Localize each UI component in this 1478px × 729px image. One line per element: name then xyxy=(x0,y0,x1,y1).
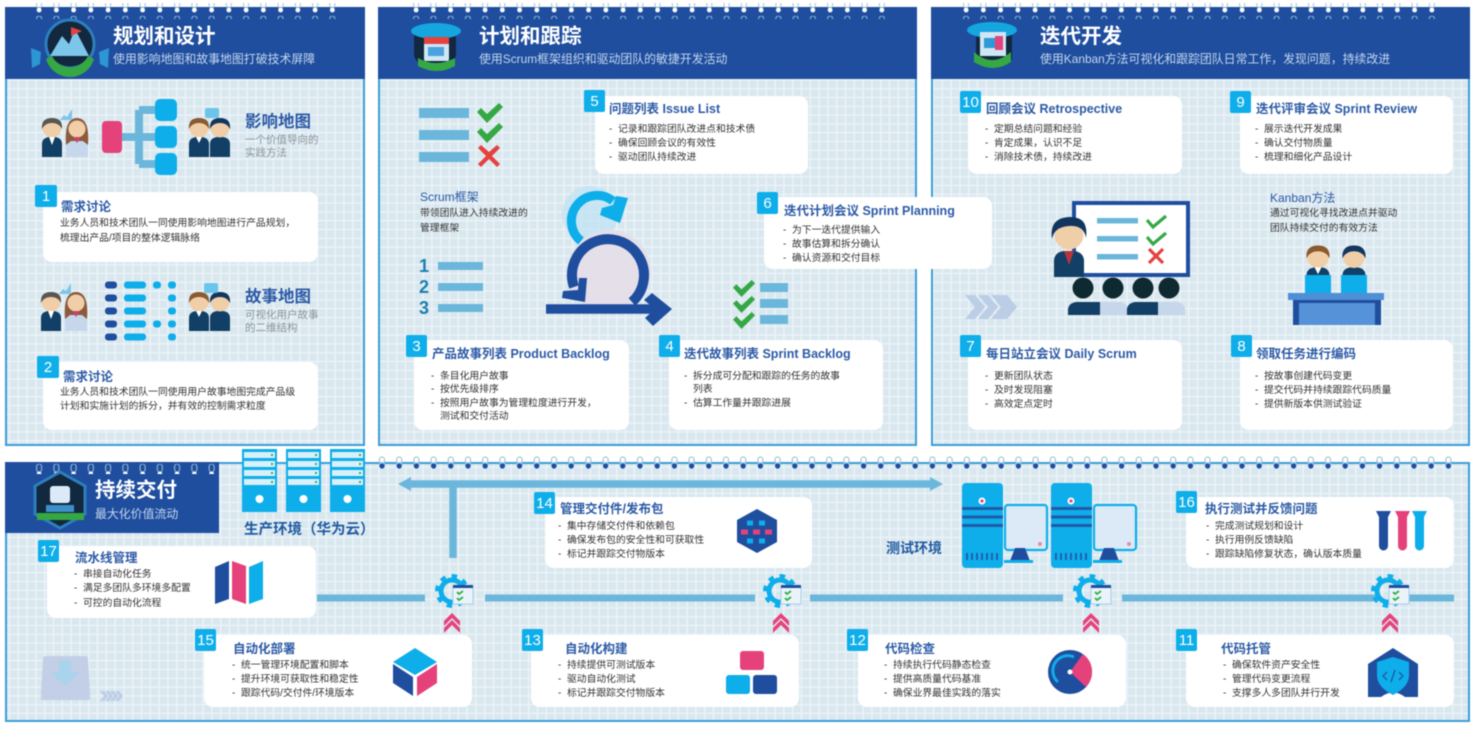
card 8: coding: - 提供新版本供测试验证 xyxy=(1255,397,1362,410)
arrow: pale chevrons small xyxy=(100,691,123,701)
card 17: pipeline: - 可控的自动化流程 xyxy=(74,596,162,609)
text: story map: 故事地图 xyxy=(245,287,311,306)
header band: continuous delivery xyxy=(5,458,219,533)
card 17: pipeline: - 串接自动化任务 xyxy=(74,567,152,580)
icon: numbered backlog: 2 xyxy=(419,277,429,297)
card 11: code hosting: - 确保软件资产安全性 xyxy=(1223,658,1320,671)
card 4: sprint backlog: - 拆分成可分配和跟踪的任务的故事 xyxy=(684,369,840,382)
card 3: product backlog: - 条目化用户故事 xyxy=(431,369,509,382)
card 16: testing: - 执行用例反馈缺陷 xyxy=(1206,533,1293,546)
card 1: requirement discussion: 梳理出产品/项目的整体逻辑脉络 xyxy=(60,231,200,244)
card 5: issue list xyxy=(584,90,808,174)
card 12: code check: - 确保业界最佳实践的落实 xyxy=(884,686,1001,699)
header band: planning and design: 使用影响地图和故事地图打破技术屏障 xyxy=(113,52,315,66)
text: impact map: 一个价值导向的 xyxy=(245,133,318,146)
text: Kanban method: Kanban方法 xyxy=(1270,190,1335,205)
panel: iteration development xyxy=(931,3,1470,445)
card 4: sprint backlog: 列表 xyxy=(693,382,713,395)
header band: planning and tracking: 使用Scrum框架组织和驱动团队的敏捷开发活动 xyxy=(479,52,727,66)
arrow: up chevrons 1 xyxy=(444,613,460,633)
card 8: coding xyxy=(1231,335,1453,430)
icon: pipeline stage gear 2 xyxy=(765,576,801,606)
card 12: code check: - 提供高质量代码基准 xyxy=(884,672,981,685)
card 14: release packages: - 确保发布包的安全性和可获取性 xyxy=(558,533,704,546)
card 8: coding: 8 xyxy=(1237,338,1246,355)
card 15: deployment: 自动化部署 xyxy=(233,641,296,656)
card 14: release packages: - 标记并跟踪交付物版本 xyxy=(558,547,665,560)
card 14: release packages: 管理交付件/发布包 xyxy=(560,501,664,516)
card 9: sprint review xyxy=(1230,91,1453,174)
icon: test computers xyxy=(962,483,1136,568)
icon: production servers xyxy=(242,449,365,512)
card 3: product backlog: 测试和交付活动 xyxy=(440,409,509,422)
card 12: code check: 12 xyxy=(849,632,866,649)
arrow: deployment flow xyxy=(398,477,943,558)
card 17: pipeline: - 满足多团队多环境多配置 xyxy=(74,581,191,594)
card 5: issue list: - 记录和跟踪团队改进点和技术债 xyxy=(609,122,755,135)
card 5: issue list: 5 xyxy=(590,93,599,110)
card 15: deployment: - 跟踪代码/交付件/环境版本 xyxy=(232,686,354,699)
card 7: daily scrum: 每日站立会议 Daily Scrum xyxy=(986,346,1137,361)
header band: planning and design xyxy=(5,3,365,79)
card 9: sprint review: 9 xyxy=(1236,94,1245,111)
card 7: daily scrum xyxy=(960,335,1182,430)
card 4: sprint backlog: 迭代故事列表 Sprint Backlog xyxy=(684,346,851,361)
icon: numbered backlog: 1 xyxy=(419,256,429,276)
header band: planning and design: 规划和设计 xyxy=(113,25,216,48)
card 15: deployment: 15 xyxy=(197,632,214,649)
card 13: build: - 驱动自动化测试 xyxy=(558,672,636,685)
card 2: requirement discussion xyxy=(37,356,318,430)
text: impact map: 影响地图 xyxy=(245,112,311,131)
card 3: product backlog: - 按优先级排序 xyxy=(431,382,499,395)
icon: presenter and whiteboard xyxy=(1052,203,1188,315)
label: test environment: 测试环境 xyxy=(886,540,942,556)
card 7: daily scrum: - 及时发现阻塞 xyxy=(985,383,1053,396)
header band: iteration development: 使用Kanban方法可视化和跟踪团队日常工作，发现问题，持续改进 xyxy=(1040,52,1390,66)
card 3: product backlog xyxy=(406,335,629,430)
card 11: code hosting: 代码托管 xyxy=(1221,641,1271,656)
card 10: retrospective xyxy=(960,91,1182,174)
card 14: release packages xyxy=(534,492,812,568)
header band: planning and tracking xyxy=(378,3,917,79)
card 3: product backlog: 产品故事列表 Product Backlog xyxy=(432,346,610,361)
label: production environment: 生产环境（华为云） xyxy=(244,520,374,538)
card 7: daily scrum: 7 xyxy=(966,338,975,355)
card 13: build: - 标记并跟踪交付物版本 xyxy=(558,686,665,699)
card 11: code hosting xyxy=(1176,629,1454,707)
card 2: requirement discussion: 需求讨论 xyxy=(63,369,114,384)
card 1: requirement discussion: 需求讨论 xyxy=(61,199,112,214)
card 3: product backlog: 3 xyxy=(412,338,421,355)
card 5: issue list: 问题列表 Issue List xyxy=(609,101,721,116)
text: Scrum framework xyxy=(420,190,528,234)
card 11: code hosting: - 管理代码变更流程 xyxy=(1223,672,1311,685)
card 14: release packages: 14 xyxy=(536,495,553,512)
panel: planning and design xyxy=(5,3,365,445)
arrow: up chevrons 2 xyxy=(773,613,789,633)
card 10: retrospective: 回顾会议 Retrospective xyxy=(986,101,1122,116)
card 11: code hosting: - 支撑多人多团队并行开发 xyxy=(1223,686,1340,699)
card 10: retrospective: - 定期总结问题和经验 xyxy=(985,122,1082,135)
icon: pipeline stage gear 4 xyxy=(1373,576,1409,606)
card 9: sprint review: - 展示迭代开发成果 xyxy=(1255,122,1343,135)
text: story map: 可视化用户故事 xyxy=(245,308,319,321)
card 16: testing: 执行测试并反馈问题 xyxy=(1205,501,1318,516)
card 2: requirement discussion: 计划和实施计划的拆分，并有效的控制需求粒度 xyxy=(60,399,266,412)
card 13: build: 自动化构建 xyxy=(565,641,628,656)
card 17: pipeline: 17 xyxy=(40,543,57,560)
text: Scrum framework: 带领团队进入持续改进的 xyxy=(420,206,528,219)
card 2: requirement discussion: 2 xyxy=(44,359,52,376)
text: Kanban method: 通过可视化寻找改进点并驱动 xyxy=(1270,206,1398,219)
arrow: pale chevrons xyxy=(965,295,1017,319)
card 17: pipeline xyxy=(38,540,316,618)
header band: planning and tracking: 计划和跟踪 xyxy=(479,25,582,48)
card 12: code check: 代码检查 xyxy=(885,641,936,656)
text: impact map xyxy=(245,112,318,159)
card 12: code check xyxy=(847,629,1126,707)
icon: numbered backlog xyxy=(419,256,483,318)
card 15: deployment: - 提升环境可获取性和稳定性 xyxy=(232,672,359,685)
card 6: sprint planning: 迭代计划会议 Sprint Planning xyxy=(784,203,955,218)
header band: continuous delivery: 最大化价值流动 xyxy=(95,507,178,521)
text: Scrum framework: Scrum框架 xyxy=(420,190,479,204)
card 9: sprint review: - 确认交付物质量 xyxy=(1255,136,1333,149)
card 7: daily scrum: - 更新团队状态 xyxy=(985,369,1053,382)
text: Scrum framework: 管理框架 xyxy=(420,221,459,234)
card 1: requirement discussion: 1 xyxy=(42,188,50,205)
card 13: build xyxy=(522,629,799,707)
text: Kanban method: 团队持续交付的有效方法 xyxy=(1270,221,1378,234)
card 17: pipeline: 流水线管理 xyxy=(75,550,138,565)
text: story map xyxy=(245,287,319,334)
panel: planning and tracking xyxy=(378,3,992,445)
card 3: product backlog: - 按照用户故事为管理粒度进行开发， xyxy=(431,396,597,409)
card 16: testing: - 跟踪缺陷修复状态，确认版本质量 xyxy=(1206,547,1362,560)
icon: developers at desk xyxy=(1288,246,1384,325)
card 7: daily scrum: - 高效定点定时 xyxy=(985,397,1053,410)
diagram: impact map xyxy=(42,99,230,175)
pipeline line xyxy=(317,594,1454,602)
card 8: coding: - 提交代码并持续跟踪代码质量 xyxy=(1255,383,1392,396)
diagram: story map xyxy=(41,282,230,340)
card 5: issue list: - 驱动团队持续改进 xyxy=(609,150,697,163)
panel: continuous delivery xyxy=(5,449,1469,721)
card 6: sprint planning: - 故事估算和拆分确认 xyxy=(783,237,880,250)
icon: pipeline stage gear 1 xyxy=(437,576,473,606)
card 13: build: 13 xyxy=(524,632,541,649)
icon: sprint checklist xyxy=(733,280,788,329)
text: story map: 的二维结构 xyxy=(245,321,298,334)
card 6: sprint planning: - 确认资源和交付目标 xyxy=(783,251,880,264)
card 9: sprint review: 迭代评审会议 Sprint Review xyxy=(1256,101,1417,116)
card 10: retrospective: - 肯定成果，认识不足 xyxy=(985,136,1082,149)
header band: iteration development xyxy=(931,3,1470,79)
card 12: code check: - 持续执行代码静态检查 xyxy=(884,658,991,671)
card 6: sprint planning xyxy=(757,192,992,269)
card 5: issue list: - 确保回顾会议的有效性 xyxy=(609,136,716,149)
card 15: deployment: - 统一管理环境配置和脚本 xyxy=(232,658,349,671)
card 6: sprint planning: - 为下一迭代提供输入 xyxy=(783,223,880,236)
card 4: sprint backlog: - 估算工作量并跟踪进展 xyxy=(684,396,791,409)
icon: numbered backlog: 3 xyxy=(419,298,429,318)
icon: checklist xyxy=(419,103,503,167)
card 1: requirement discussion xyxy=(35,185,318,262)
card 11: code hosting: 11 xyxy=(1179,632,1194,649)
arrow: up chevrons 4 xyxy=(1382,613,1398,633)
card 4: sprint backlog xyxy=(659,335,883,430)
card 2: requirement discussion: 业务人员和技术团队一同使用用户故事地图完成产品级 xyxy=(60,385,295,398)
card 15: deployment xyxy=(195,629,472,707)
diagram: scrum iteration loop xyxy=(546,186,672,326)
card 9: sprint review: - 梳理和细化产品设计 xyxy=(1255,150,1352,163)
card 10: retrospective: - 消除技术债，持续改进 xyxy=(985,150,1092,163)
header band: continuous delivery: 持续交付 xyxy=(95,478,177,502)
header band: iteration development: 迭代开发 xyxy=(1040,25,1122,48)
card 14: release packages: - 集中存储交付件和依赖包 xyxy=(558,519,675,532)
card 1: requirement discussion: 业务人员和技术团队一同使用影响地图进行产品规划， xyxy=(60,216,295,229)
arrow: up chevrons 3 xyxy=(1083,613,1099,633)
card 6: sprint planning: 6 xyxy=(763,195,772,212)
icon: pipeline stage gear 3 xyxy=(1075,576,1111,606)
card 4: sprint backlog: 4 xyxy=(665,338,674,355)
card 16: testing: 16 xyxy=(1178,494,1195,511)
text: impact map: 实践方法 xyxy=(245,146,287,159)
text: Kanban method xyxy=(1270,190,1398,234)
card 8: coding: - 按故事创建代码变更 xyxy=(1255,369,1352,382)
card 10: retrospective: 10 xyxy=(962,94,979,111)
icon: pale inbox xyxy=(41,656,90,700)
card 16: testing: - 完成测试规划和设计 xyxy=(1206,519,1303,532)
card 13: build: - 持续提供可测试版本 xyxy=(558,658,655,671)
card 16: testing xyxy=(1176,491,1454,568)
card 8: coding: 领取任务进行编码 xyxy=(1256,346,1356,361)
